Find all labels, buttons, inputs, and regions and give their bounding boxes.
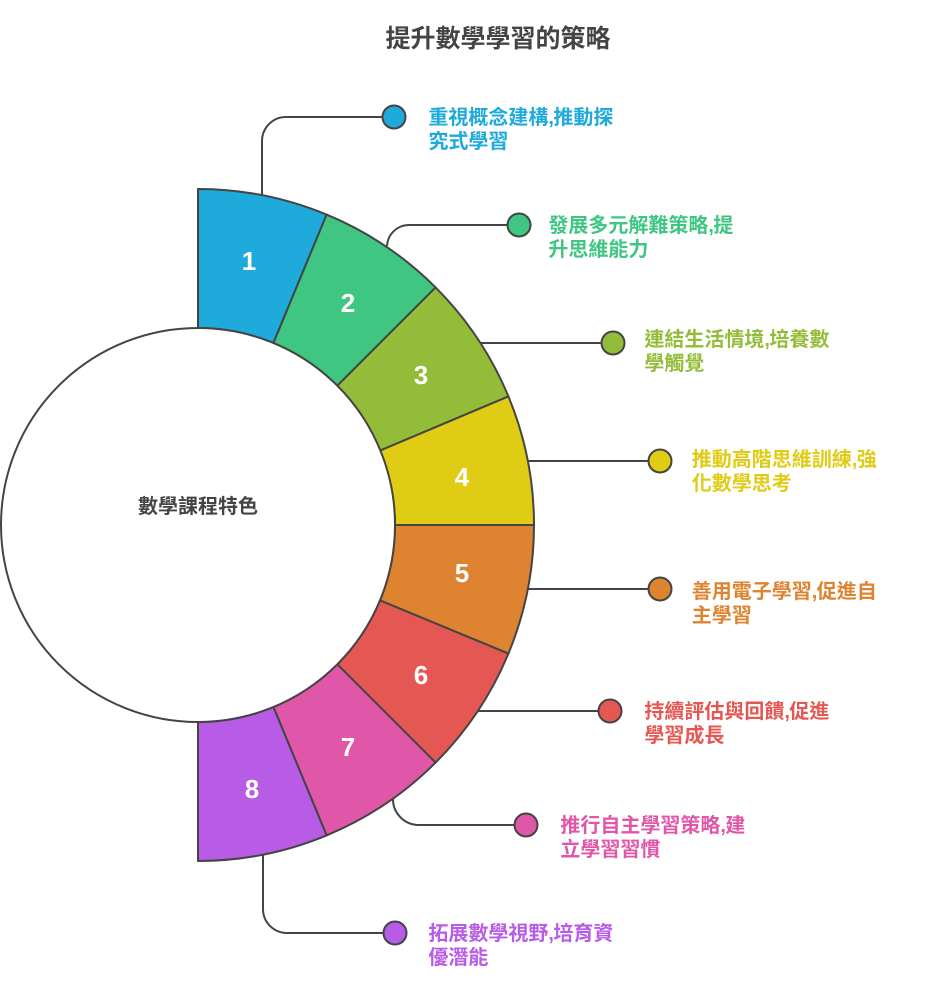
item 7: 推行自主學習策略,建	[560, 815, 745, 837]
segment 4: 4	[455, 462, 470, 492]
segment 2	[273, 215, 436, 386]
segment 4	[380, 396, 534, 525]
item 2	[508, 213, 733, 261]
item 1: 究式學習	[428, 130, 508, 153]
item 4	[648, 447, 877, 495]
item 1: 重視概念建構,推動探	[428, 107, 613, 129]
item 7	[514, 813, 745, 861]
item 2: 升思維能力	[548, 238, 648, 261]
item 6	[598, 699, 829, 747]
item 3: 連結生活情境,培養數	[644, 329, 829, 351]
segment 1: 1	[242, 246, 256, 276]
item 5	[648, 578, 877, 627]
segment 6: 6	[414, 660, 428, 690]
item 7: 立學習習慣	[560, 837, 660, 861]
item 4: 推動高階思維訓練,強	[692, 449, 877, 471]
item 8: 優潛能	[428, 946, 488, 969]
segment 1	[198, 189, 327, 343]
center circle	[1, 328, 395, 722]
segment 2: 2	[341, 288, 355, 318]
segment 7: 7	[341, 732, 355, 762]
segment 7	[273, 664, 436, 835]
title: 提升數學學習的策略	[385, 25, 611, 53]
item 2: 發展多元解難策略,提	[548, 215, 733, 237]
item 4: 化數學思考	[692, 472, 792, 495]
item 6: 持續評估與回饋,促進	[644, 701, 829, 723]
segment 5: 5	[455, 558, 469, 588]
segment 8	[198, 707, 327, 861]
item 5: 善用電子學習,促進自	[692, 581, 877, 603]
item 6: 學習成長	[644, 723, 724, 747]
item 1	[382, 105, 613, 153]
connectors	[262, 117, 648, 933]
segment 6	[337, 600, 508, 763]
segment 3	[337, 287, 508, 451]
segment 8: 8	[245, 774, 259, 804]
segment 3: 3	[414, 360, 428, 390]
segment 5	[380, 525, 534, 654]
center circle: 數學課程特色	[138, 495, 258, 518]
item 3	[602, 327, 829, 375]
item 8	[384, 921, 613, 969]
item 8: 拓展數學視野,培育資	[428, 923, 613, 945]
item 3: 學觸覺	[644, 352, 704, 375]
item 5: 主學習	[692, 604, 752, 627]
